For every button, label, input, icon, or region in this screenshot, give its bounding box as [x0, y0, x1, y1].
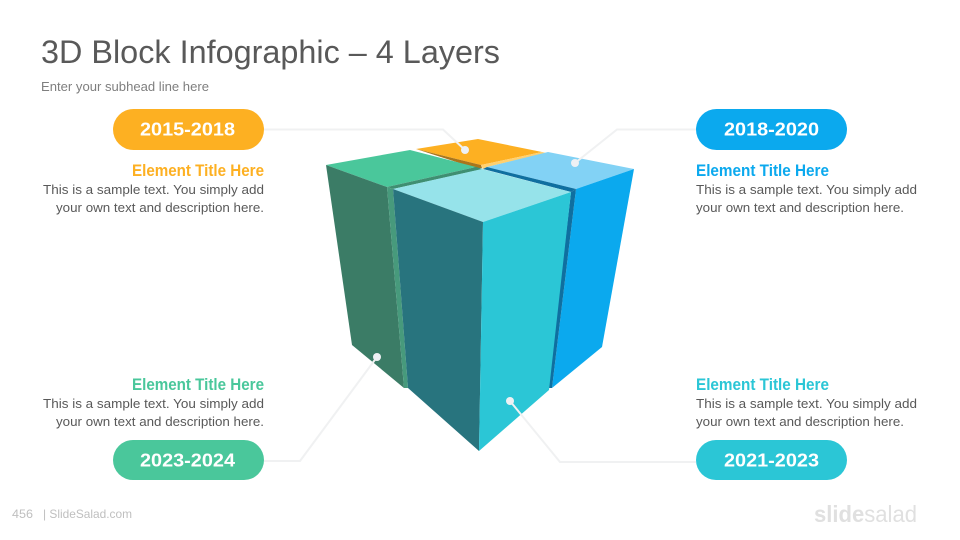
- body text: This is a sample text. You simply add: [43, 183, 264, 197]
- pill: 2018-2020: [724, 118, 819, 140]
- body text: This is a sample text. You simply add: [696, 183, 917, 197]
- pill: 2021-2023: [724, 450, 819, 470]
- body text: your own text and description here.: [696, 415, 904, 429]
- dot: top left: [461, 146, 469, 154]
- logo: slidesalad: slidesalad: [814, 501, 917, 527]
- pill: [113, 109, 264, 150]
- footer: site: | SlideSalad.com: [43, 507, 132, 521]
- connector: top left: [264, 130, 465, 150]
- body text: [696, 397, 917, 429]
- connector: top right: [575, 130, 696, 163]
- 3D block: [326, 139, 634, 451]
- subhead: Enter your subhead line here: [41, 80, 209, 94]
- pill: [696, 440, 847, 480]
- layer: teal: [393, 169, 571, 451]
- layer: green: [326, 150, 483, 388]
- layer: blue: [483, 152, 634, 388]
- body text: your own text and description here.: [696, 201, 904, 215]
- panel: 2015-2018: [43, 109, 264, 215]
- dot: bottom left: [373, 353, 381, 361]
- heading: Element Title Here: [132, 162, 264, 180]
- pill: [696, 109, 847, 150]
- heading: Element Title Here: [132, 376, 264, 394]
- body text: This is a sample text. You simply add: [43, 397, 264, 411]
- pill: 2015-2018: [140, 118, 235, 140]
- dot: top right: [571, 159, 579, 167]
- body text: [696, 183, 917, 215]
- layer: orange: [416, 139, 546, 169]
- body text: your own text and description here.: [56, 415, 264, 429]
- connector: bottom right: [510, 401, 696, 462]
- panel: 2018-2020: [696, 109, 917, 215]
- title: 3D Block Infographic – 4 Layers: [41, 34, 500, 70]
- heading: Element Title Here: [696, 376, 829, 394]
- footer: page number: 456: [12, 507, 33, 521]
- panel: 2021-2023: [696, 376, 917, 480]
- pill: [113, 440, 264, 480]
- pill: 2023-2024: [140, 450, 236, 470]
- body text: This is a sample text. You simply add: [696, 397, 917, 411]
- dot: bottom right: [506, 397, 514, 405]
- body text: [43, 397, 264, 429]
- panel: 2023-2024: [43, 376, 264, 480]
- heading: Element Title Here: [696, 162, 829, 180]
- body text: [43, 183, 264, 215]
- body text: your own text and description here.: [56, 201, 264, 215]
- connector: bottom left: [264, 357, 377, 461]
